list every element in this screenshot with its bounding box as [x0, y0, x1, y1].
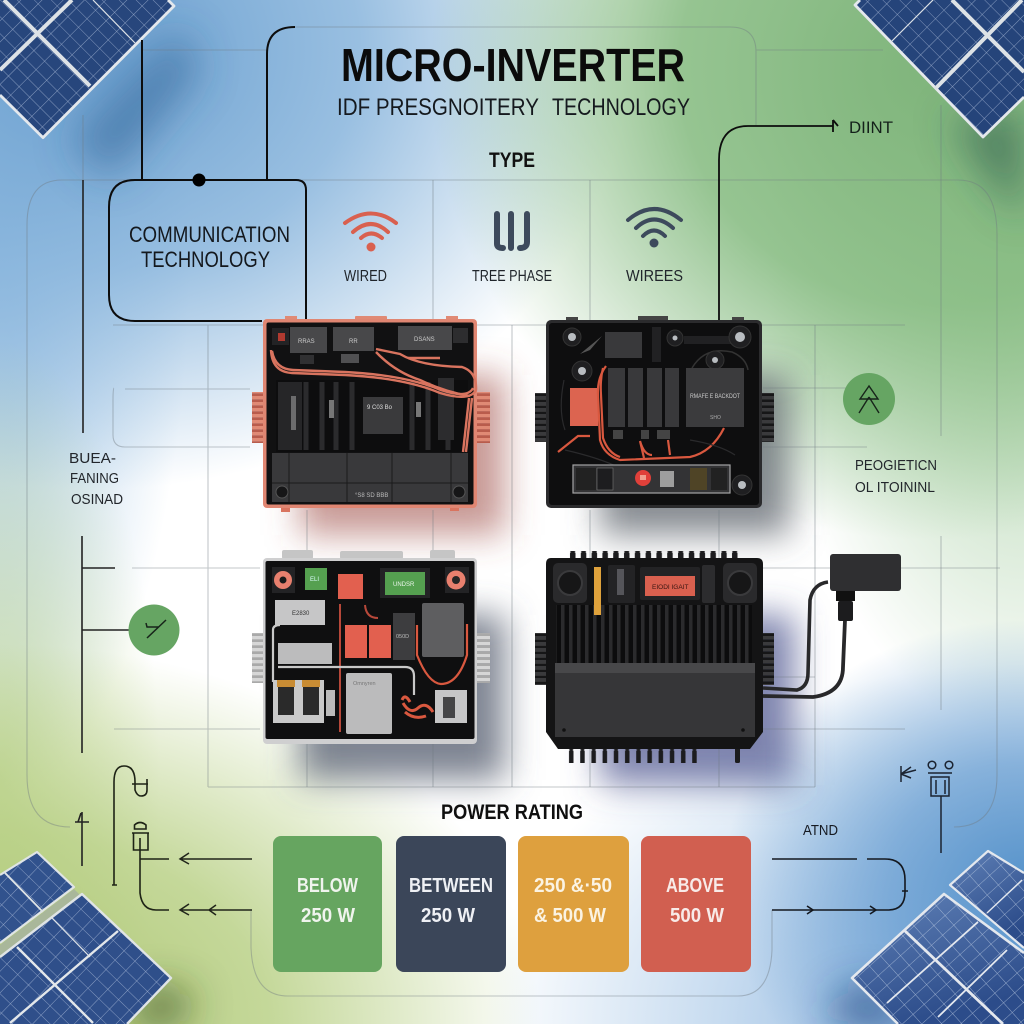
type: wireless	[626, 209, 683, 285]
type: three phase	[472, 214, 552, 285]
card: 250 and 500 W: & 500 W	[534, 905, 606, 927]
green circle icon: left	[128, 604, 180, 656]
card: between 250 W: 250 W	[421, 905, 475, 927]
card: between 250 W	[396, 836, 506, 972]
subtitle: IDF PRESGNOITERY	[337, 94, 539, 121]
card: above 500 W	[641, 836, 751, 972]
inverter 1: salmon: DSANS	[414, 337, 435, 343]
subtitle: TECHNOLOGY	[552, 94, 690, 121]
type: wired: WIRED	[344, 268, 387, 285]
inverter 1: salmon: RRAS	[298, 339, 315, 345]
solar panel: bottom left	[0, 852, 171, 1024]
card: below 250 W: BELOW	[297, 875, 358, 897]
right label	[855, 457, 937, 496]
card: above 500 W: 500 W	[670, 905, 724, 927]
communication technology box: COMMUNICATION	[129, 222, 290, 247]
inverter 3: silver	[252, 550, 490, 744]
arrow with label: DIINT	[719, 119, 893, 320]
inverter 1: salmon: RR	[349, 339, 358, 345]
title: MICRO-INVERTER	[341, 39, 685, 91]
card: 250 and 500 W: 250 &·50	[534, 875, 612, 897]
inverter 1: salmon	[252, 316, 490, 512]
card: between 250 W: BETWEEN	[409, 875, 493, 897]
communication technology box	[109, 174, 306, 321]
inverter 2: black: RMAFE E BACKDOT	[690, 393, 740, 400]
inverter 3: silver: E2830	[292, 611, 310, 617]
arrow with label: DIINT: DIINT	[849, 119, 893, 137]
device shadows	[300, 375, 795, 785]
inverter 3: silver: ELI	[310, 577, 319, 583]
heading: type: TYPE	[489, 148, 535, 172]
inverter 1: salmon: 9 C03 Bo	[367, 405, 393, 411]
type: wired	[344, 214, 396, 285]
inverter 1: salmon: °S8 SD BBB	[355, 493, 388, 499]
type: wireless: WIREES	[626, 268, 683, 285]
card: 250 and 500 W	[518, 836, 629, 972]
solar panel: top right	[855, 0, 1024, 137]
left label: FANING	[70, 471, 119, 487]
inverter 2: black: SHO	[710, 415, 721, 421]
left label	[69, 451, 123, 508]
right connector with arrows	[772, 859, 908, 914]
inverter 3: silver: Omnyren	[353, 681, 376, 687]
inverter 4: black with heat-sink and plug: EIODI IGAIT	[652, 584, 689, 591]
left label: BUEA-	[69, 451, 116, 467]
right label: OL ITOININL	[855, 479, 935, 496]
right upper symbol: plug	[901, 761, 953, 853]
card: above 500 W: ABOVE	[666, 875, 724, 897]
heading: power rating: POWER RATING	[441, 801, 583, 824]
right label: ATND: ATND	[803, 822, 838, 839]
left arrows	[180, 853, 252, 915]
communication technology box: TECHNOLOGY	[141, 247, 270, 272]
type: three phase: TREE PHASE	[472, 268, 552, 285]
card: below 250 W	[273, 836, 382, 972]
solar panel: bottom right	[852, 851, 1024, 1024]
inverter 3: silver: 050D	[396, 634, 409, 640]
left lower symbols: hook and plug	[112, 766, 169, 910]
card: below 250 W: 250 W	[301, 905, 355, 927]
inverter 2: black	[535, 316, 774, 508]
left label: OSINAD	[71, 492, 123, 508]
inverter 4: black with heat-sink and plug	[535, 551, 901, 763]
inverter 3: silver: UNDSR	[393, 582, 415, 588]
solar panel: top left	[0, 0, 174, 138]
left bus line and tree	[75, 180, 129, 866]
right label: PEOGIETICN	[855, 457, 937, 474]
green circle icon: right	[843, 373, 895, 425]
subtitle	[337, 94, 690, 121]
connector lines: communication box	[142, 27, 295, 180]
